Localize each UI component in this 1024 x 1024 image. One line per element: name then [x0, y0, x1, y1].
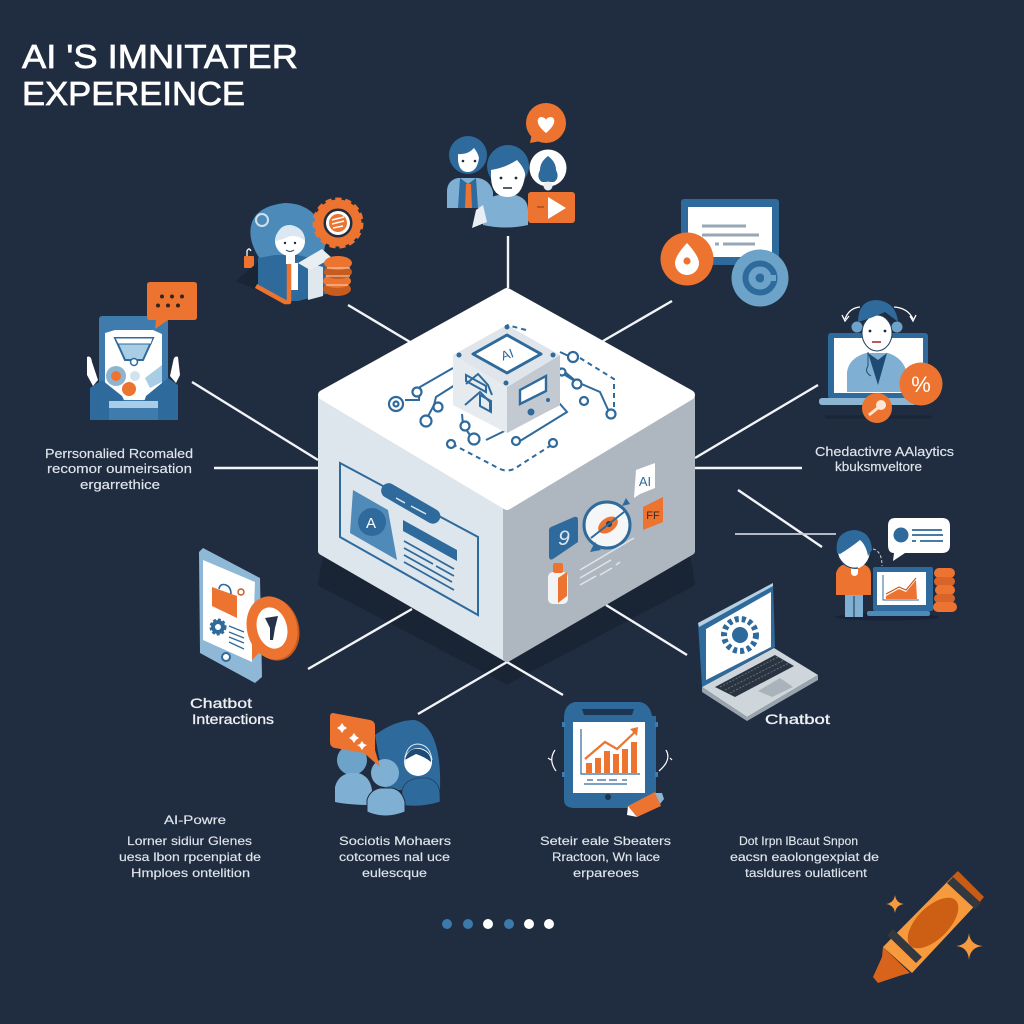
bottle: [548, 563, 568, 604]
chat bubble: [147, 282, 197, 329]
AI tag: AI: [639, 474, 651, 489]
icon: laptop: [698, 583, 818, 721]
icon: team with chat: [330, 713, 440, 816]
label: chatbot interactions: Interactions: [192, 712, 274, 727]
side brackets: [548, 750, 672, 771]
orange tile: [643, 497, 663, 530]
number tile: 9: [558, 527, 570, 550]
video player: [528, 192, 575, 223]
label: column 1: Lorner sidiur Glenes: [127, 834, 252, 848]
label: column 2: Sociotis Mohaers: [339, 834, 451, 848]
icon: crayon: [873, 871, 984, 983]
man avatar: [472, 145, 529, 228]
profile circle: [530, 150, 566, 190]
icon: tablet with bubble: [199, 548, 306, 683]
title: AI 'S IMNITATER: [22, 38, 298, 75]
trend arrow: [585, 731, 636, 759]
rotation arrows: [845, 307, 913, 319]
label: column 3: erpareoes: [573, 866, 639, 880]
label: column 1: [119, 813, 261, 880]
label: personalized recommendation: recomor oumeirsation: [47, 462, 192, 476]
label: column 3: Seteir eale Sbeaters: [540, 834, 671, 848]
agent: [847, 300, 907, 392]
cube left face: [322, 398, 507, 658]
label: column 1: Hmploes ontelition: [131, 866, 250, 880]
icon: support agent on laptop: [819, 300, 942, 423]
agent figure: [836, 530, 872, 617]
screen network graphic: [724, 619, 756, 651]
icon: person with gear and coins: [236, 200, 361, 302]
label: personalized recommendation: ergarrethice: [80, 478, 160, 492]
orange lamp bubble: [240, 591, 306, 666]
blue C badge: [732, 250, 788, 306]
number tile: [549, 517, 578, 560]
icon: document with badges: [660, 199, 788, 306]
label: personalized recommendation: [45, 447, 193, 492]
orange droplet badge: [660, 232, 714, 286]
label: column 3: [540, 834, 671, 880]
icon: people with chat and video: [447, 103, 575, 228]
message bubble: [888, 518, 950, 561]
label: column 1: uesa lbon rpcenpiat de: [119, 850, 261, 864]
pagination dots: [442, 919, 554, 929]
label: column 4: Dot Irpn lBcaut Snpon: [739, 834, 858, 848]
laptop: [828, 333, 928, 399]
cube right face: [507, 398, 691, 658]
pill header: [378, 480, 443, 526]
eye lens: [584, 498, 630, 552]
person head: [275, 225, 305, 264]
gears: [106, 366, 140, 396]
label: column 1: AI-Powre: [164, 813, 226, 827]
label: analytics: kbuksmveltore: [835, 460, 922, 474]
icon: support agent with chart: [835, 518, 957, 620]
cube top face: [323, 293, 690, 505]
title: EXPEREINCE: [22, 75, 245, 112]
bars: [586, 742, 637, 773]
agent right: [402, 744, 440, 806]
percent badge: %: [911, 372, 931, 397]
connector lines: [192, 236, 836, 714]
key badge: [862, 393, 892, 423]
circuit traces: [389, 325, 616, 470]
label: chatbot interactions: Chatbot: [190, 695, 252, 711]
lock: [244, 249, 254, 268]
label: chatbot interactions: [190, 695, 274, 727]
keyboard: [715, 655, 794, 697]
coin stack: [323, 256, 352, 296]
left face screen panel: [340, 463, 478, 615]
brain cloud: [250, 203, 325, 262]
right face icons: [548, 463, 663, 604]
trackpad: [758, 678, 793, 697]
person left: [335, 745, 372, 805]
label: column 4: tasldures oulatlicent: [745, 866, 868, 880]
central cube: [322, 293, 691, 658]
label: chatbot right: Chatbot: [765, 711, 830, 727]
shopping bag: [212, 584, 244, 618]
gear: [315, 200, 361, 246]
label: column 4: eacsn eaolongexpiat de: [730, 850, 879, 864]
coins: [933, 568, 957, 612]
axes: [581, 729, 640, 774]
orange bubble: [330, 713, 380, 767]
pencil: [627, 792, 664, 817]
text lines: [403, 520, 457, 561]
label: column 3: Rractoon, Wn lace: [552, 850, 660, 864]
chart laptop: [867, 567, 933, 616]
image tile: [350, 490, 397, 560]
label: column 2: cotcomes nal uce: [339, 850, 450, 864]
label: personalized recommendation: Perrsonalied Rcomaled: [45, 447, 193, 461]
open book body: [236, 249, 332, 302]
icon: tablet with growth chart: [548, 702, 672, 817]
heart speech bubble: [526, 103, 566, 143]
hands: [87, 357, 180, 420]
woman avatar: [447, 136, 493, 208]
small AI cube: [453, 324, 560, 433]
cube shadow: [322, 500, 691, 680]
label: column 2: eulescque: [362, 866, 427, 880]
label: column 4: [730, 834, 879, 880]
AI badge: AI: [499, 345, 516, 364]
gear: [210, 620, 226, 634]
label: analytics: Chedactivre AAlaytics: [815, 445, 954, 459]
icon: phone with hands and funnel: [87, 282, 197, 420]
label: analytics: [815, 445, 954, 474]
orange tile: FF: [646, 510, 660, 522]
AI tag: [634, 463, 655, 498]
funnel: [115, 338, 153, 366]
left face screen panel: A: [366, 515, 376, 532]
sparkles: [886, 895, 904, 913]
person center: [367, 759, 405, 816]
title: [22, 38, 298, 112]
label: column 2: [339, 834, 451, 880]
